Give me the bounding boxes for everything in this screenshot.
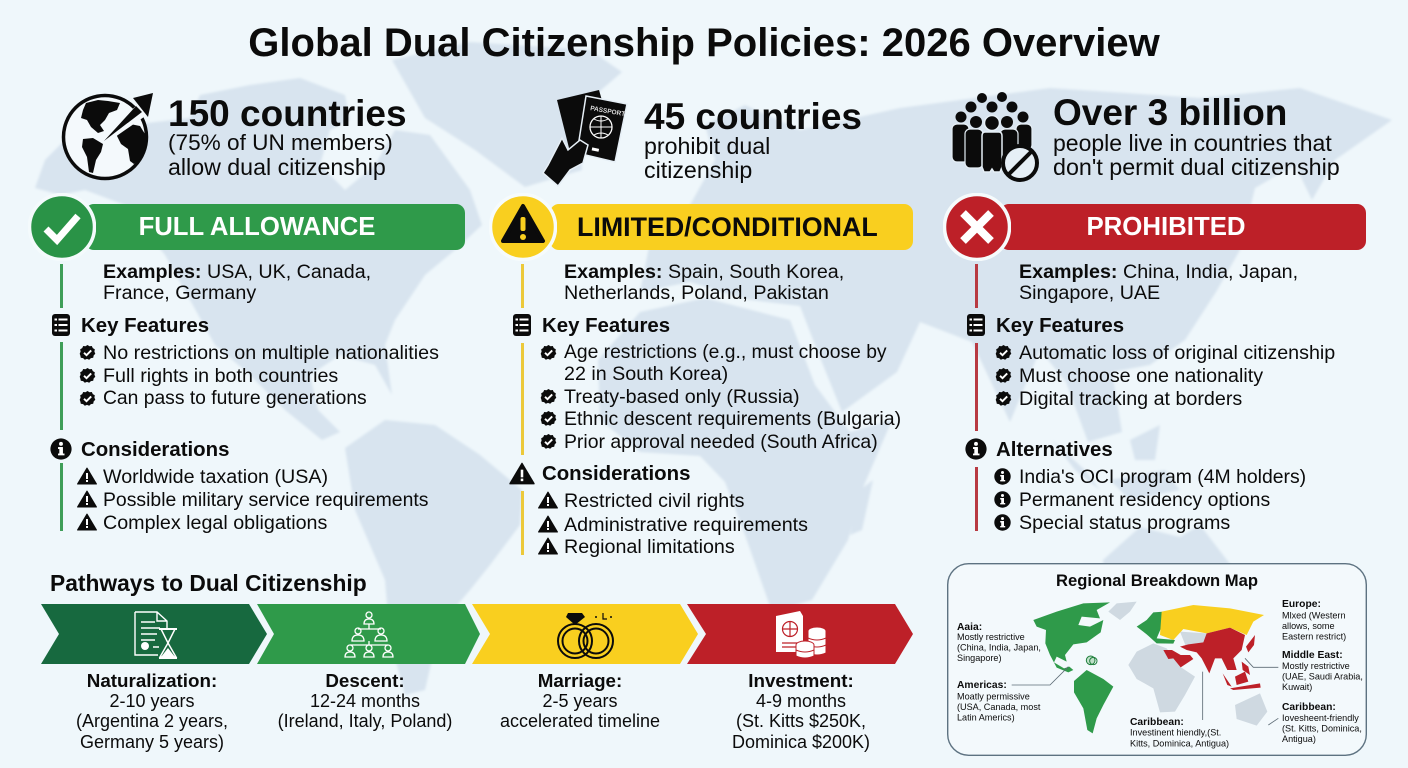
chevron: investment [687, 604, 913, 664]
pathway text: marriage: Marriage: [538, 670, 622, 691]
pathway text: naturalization: (Argentina 2 years, [76, 711, 228, 731]
label: Middle East [1282, 650, 1363, 692]
pathway text: investment: (St. Kitts $250K, [736, 711, 866, 731]
key features list [80, 342, 439, 409]
icon: globe with arrow [62, 93, 153, 180]
icon: info [965, 438, 987, 460]
examples: Netherlands, Poland, Pakistan [564, 282, 829, 304]
pathway text: investment: 4-9 months [756, 691, 846, 711]
examples [103, 261, 371, 304]
map heading: Regional Breakdown Map [1056, 571, 1258, 590]
pathway text: naturalization: Naturalization: [87, 670, 217, 691]
icon: warning [509, 462, 535, 484]
key features list: Treaty-based only (Russia) [564, 386, 800, 408]
icon: hand holding passports [542, 90, 628, 186]
stat: over 3 billion: don't permit dual citizenship [1053, 154, 1340, 180]
icon: cross badge [943, 193, 1011, 261]
icon: warning badge [492, 196, 557, 258]
stat: 150 countries [62, 93, 407, 180]
alternatives list: Special status programs [1019, 512, 1230, 534]
key features list: Must choose one nationality [1019, 365, 1263, 387]
key features list: Automatic loss of original citizenship [1019, 342, 1335, 364]
icon: info [50, 438, 72, 460]
label: Europe: allows, some [1282, 621, 1335, 631]
icon: crowd with prohibition sign [952, 92, 1039, 182]
considerations list: Regional limitations [564, 536, 735, 558]
pathway text: marriage: accelerated timeline [500, 711, 660, 731]
panel: regional breakdown map [947, 563, 1367, 756]
label: Europe: Eastern restrict) [1282, 632, 1346, 642]
label: Caribbean bottom: Kitts, Dominica, Antigua) [1130, 738, 1229, 748]
title: Global Dual Citizenship Policies: 2026 Overview [248, 21, 1160, 65]
banner: limited / conditional: LIMITED/CONDITIONAL [577, 212, 878, 242]
icon: list [513, 314, 531, 336]
pathway text: descent [278, 670, 452, 731]
banner: prohibited [1000, 204, 1366, 250]
stat: 45 countries [542, 90, 862, 186]
considerations list [538, 490, 808, 558]
key features list [996, 342, 1335, 410]
label: Caribbean right: Antigua) [1282, 734, 1316, 744]
label: Americas [957, 680, 1041, 722]
pathway text: descent: 12-24 months [310, 691, 420, 711]
considerations list: Restricted civil rights [564, 490, 745, 512]
key features list: Can pass to future generations [103, 388, 367, 409]
label: Middle East: Kuwait) [1282, 682, 1312, 692]
label: Europe: Mlxed (Western [1282, 610, 1346, 620]
banner: prohibited: PROHIBITED [1086, 213, 1246, 241]
examples [1019, 261, 1298, 304]
pathway text: descent: (Ireland, Italy, Poland) [278, 711, 452, 731]
label: Middle East: Middle East: [1282, 650, 1343, 661]
heading: key features: Key Features [996, 315, 1124, 337]
label: Americas: Moatly permissive [957, 692, 1030, 702]
key features list: No restrictions on multiple nationalities [103, 342, 439, 364]
stat: 150 countries: allow dual citizenship [168, 154, 386, 180]
alternatives list [994, 466, 1306, 534]
label: Caribbean bottom: Caribbean: [1130, 717, 1184, 728]
icon: list [967, 314, 985, 336]
stat: 45 countries: citizenship [644, 157, 752, 183]
label: Americas: Americas: [957, 680, 1007, 691]
banner: full allowance: FULL ALLOWANCE [139, 213, 375, 241]
considerations list: Worldwide taxation (USA) [103, 466, 328, 488]
label: Caribbean right: Caribbean: [1282, 702, 1336, 713]
label: Asia: Aaia: [957, 622, 982, 633]
heading: key features: Key Features [81, 315, 209, 337]
heading: pathways: Pathways to Dual Citizenship [50, 570, 367, 596]
pathway chevrons [41, 604, 913, 664]
key features list: Ethnic descent requirements (Bulgaria) [564, 408, 901, 430]
examples: Examples: China, India, Japan, [1019, 261, 1298, 283]
label: Caribbean right: (St. Kitts, Dominica, [1282, 724, 1362, 734]
label: Asia: (China, India, Japan, [957, 642, 1041, 652]
label: Americas: Latin Americs) [957, 712, 1015, 722]
examples: Examples: USA, UK, Canada, [103, 261, 371, 283]
icon: check badge [31, 193, 96, 258]
examples: Examples: Spain, South Korea, [564, 261, 844, 283]
label: Asia: Singapore) [957, 653, 1002, 663]
label: Asia: Mostly restrictive [957, 632, 1025, 642]
pathway text: descent: Descent: [325, 670, 405, 691]
stat figure: Over 3 billion [1053, 92, 1287, 133]
examples [564, 261, 844, 304]
key features list [540, 342, 901, 453]
key features list: Age restrictions (e.g., must choose by [564, 342, 887, 363]
banner: limited / conditional [550, 204, 913, 250]
icon: list [52, 314, 70, 336]
pathway text: investment [732, 670, 870, 752]
alternatives list: Permanent residency options [1019, 489, 1270, 511]
considerations list: Possible military service requirements [103, 489, 428, 511]
banner: full allowance [85, 204, 465, 250]
stat: over 3 billion [952, 92, 1340, 182]
pathway text: investment: Investment: [748, 670, 854, 691]
stat description: people live in countries that [1053, 130, 1332, 156]
label: Caribbean right: Iovesheent-friendly [1282, 713, 1359, 723]
considerations list [77, 466, 428, 534]
considerations list: Administrative requirements [564, 514, 808, 536]
key features list: Digital tracking at borders [1019, 388, 1242, 410]
key features list: Full rights in both countries [103, 365, 338, 387]
stat description: prohibit dual [644, 133, 770, 159]
alternatives list: India's OCI program (4M holders) [1019, 466, 1306, 488]
pathway text: marriage [500, 670, 660, 731]
heading: considerations: Considerations [542, 463, 690, 485]
chevron: naturalization [41, 604, 267, 664]
examples: France, Germany [103, 282, 256, 304]
label: Asia [957, 622, 1041, 663]
panel: full allowance [31, 193, 465, 534]
label: Caribbean right [1282, 702, 1362, 744]
pathway text: naturalization [76, 670, 228, 752]
heading: key features: Key Features [542, 315, 670, 337]
label: Caribbean bottom: Investinent hiendly,(St. [1130, 728, 1221, 738]
label: Europe [1282, 599, 1346, 642]
stat figure: 150 countries [168, 93, 407, 134]
pathway text: naturalization: 2-10 years [109, 691, 195, 711]
label: Middle East: (UAE, Saudi Arabia, [1282, 672, 1363, 682]
key features list: Prior approval needed (South Africa) [564, 431, 878, 453]
panel: limited / conditional [492, 196, 913, 558]
key features list: 22 in South Korea) [564, 363, 728, 385]
label: Caribbean bottom [1130, 717, 1229, 748]
considerations list: Complex legal obligations [103, 512, 327, 534]
stat description: (75% of UN members) [168, 130, 393, 155]
heading: alternatives: Alternatives [996, 439, 1113, 461]
stat figure: 45 countries [644, 96, 862, 137]
chevron: descent [257, 604, 480, 664]
label: Europe: Europe: [1282, 599, 1321, 610]
examples: Singapore, UAE [1019, 282, 1160, 304]
panel: prohibited [943, 193, 1366, 534]
icon: hand holding passports: PASSPORT [590, 105, 626, 118]
label: Americas: (USA, Canada, most [957, 702, 1041, 712]
chevron: marriage [472, 604, 698, 664]
pathway text: marriage: 2-5 years [542, 691, 618, 711]
label: Middle East: Mostly restrictive [1282, 661, 1350, 671]
pathway text: naturalization: Germany 5 years) [80, 732, 224, 752]
pathway text: investment: Dominica $200K) [732, 732, 870, 752]
regional world map [1012, 602, 1278, 733]
heading: considerations: Considerations [81, 439, 229, 461]
